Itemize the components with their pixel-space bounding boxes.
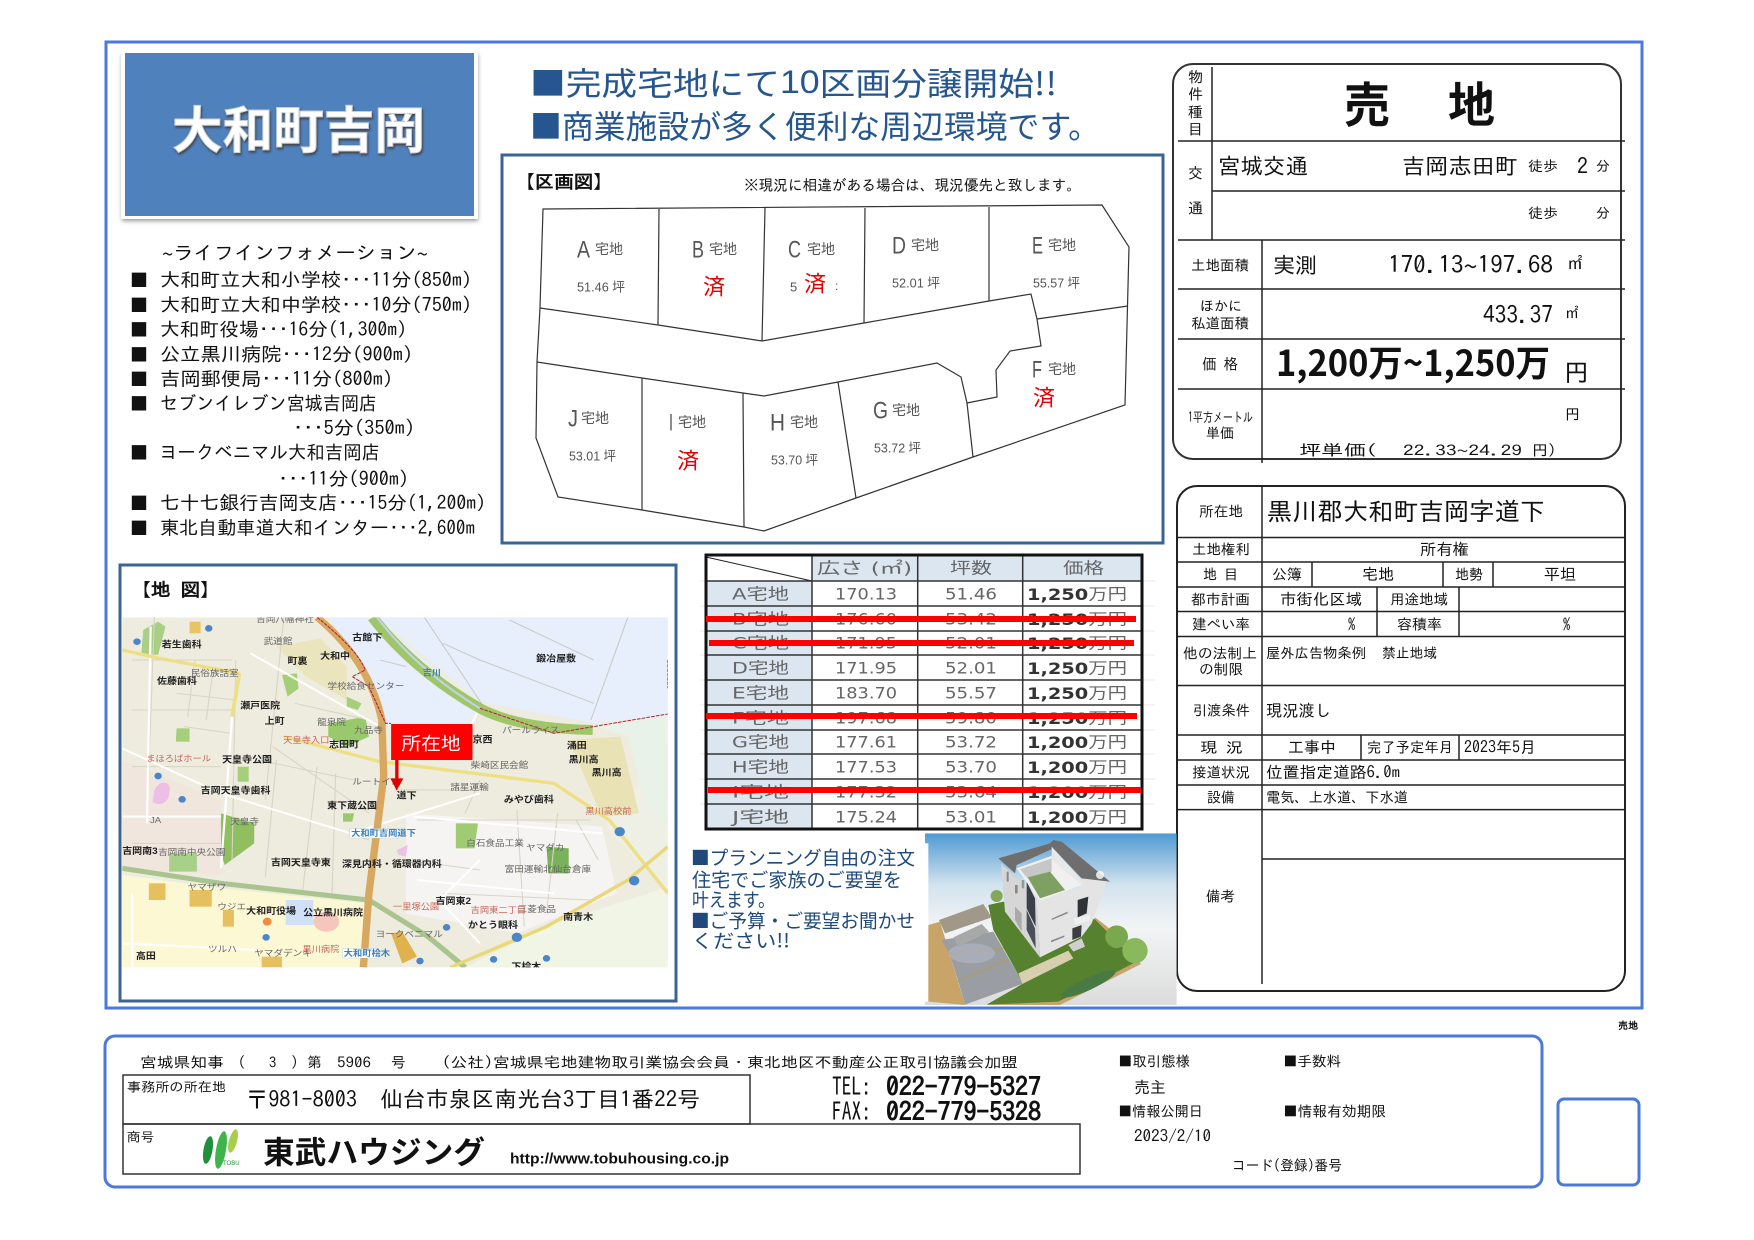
details text: 所在地 — [1199, 504, 1243, 518]
details text: 土地権利 — [1192, 542, 1250, 556]
table rows: 53.72 — [945, 732, 997, 752]
map place labels: パールライス — [502, 725, 559, 735]
property type: 売 — [1344, 66, 1390, 136]
table rows: I宅地 — [732, 782, 789, 802]
map place labels: 吉川 — [423, 667, 441, 677]
life information list: ■ — [130, 390, 148, 416]
summary grid lines — [1178, 67, 1625, 463]
table rows: 53.42 — [945, 610, 997, 628]
details text — [1183, 500, 1576, 904]
table rows: 52.01 — [945, 658, 997, 678]
map place labels: 若生歯科 — [162, 639, 202, 650]
details text: % — [1563, 616, 1570, 632]
land area: 土地面積 — [1191, 258, 1250, 272]
table rows: 52.01 — [945, 634, 997, 652]
table rows: 59.80 — [945, 708, 997, 728]
details text: 市街化区域 — [1280, 591, 1362, 607]
table rows: J宅地 — [730, 808, 789, 826]
license line: 宮城県知事 — [140, 1054, 224, 1070]
table rows: 1,200 万円 — [1027, 758, 1127, 776]
map place labels: 吉岡八幡神社 — [256, 614, 314, 624]
license line: 号 — [391, 1054, 406, 1070]
lot labels: 宅地 — [595, 241, 623, 257]
map place labels: ツルハ — [208, 944, 237, 954]
lot labels: 53.70 坪 — [771, 452, 818, 468]
plan heading: 【区画図】 — [515, 172, 613, 191]
map place labels: 天皇寺入口 — [283, 734, 329, 745]
table rows: 55.57 — [945, 684, 997, 702]
company name box: 商号 — [127, 1130, 154, 1144]
lot labels: C — [788, 236, 801, 264]
details text: % — [1348, 616, 1355, 632]
life information list: ■ — [130, 342, 148, 368]
lot labels: : — [835, 279, 838, 293]
details text: 現況渡し — [1266, 702, 1331, 718]
map place labels: 天皇寺 — [230, 816, 259, 826]
panel: property details table — [1177, 486, 1625, 991]
panel: footer company info — [105, 1036, 1542, 1187]
property type — [1188, 66, 1495, 136]
company name box — [123, 1124, 1080, 1174]
lot labels — [568, 232, 1080, 474]
lot labels: 51.46 坪 — [577, 280, 625, 294]
headline: ■完成宅地にて 10区画分譲開始!! — [530, 59, 1057, 105]
table rows: 1,250 万円 — [1027, 708, 1127, 728]
address box: 事務所の所在地 — [127, 1080, 226, 1094]
life information list: ■ — [130, 515, 148, 541]
unit price: 円) — [1532, 442, 1556, 458]
map place labels: ヤマザワ — [188, 883, 226, 892]
map place labels: 吉岡南3 — [122, 846, 158, 857]
private road area: 私道面積 — [1191, 316, 1250, 330]
table rows: 51.46 — [945, 584, 997, 604]
table rows: 1,250 万円 — [1027, 658, 1127, 678]
map place labels: かとう眼科 — [468, 920, 518, 931]
map place labels: 学校給食センター — [327, 680, 404, 691]
map place labels: 黒川病院 — [302, 945, 340, 954]
license line — [140, 1054, 1018, 1070]
map place labels: 吉岡東二丁目 — [471, 904, 526, 915]
license line: 3 — [269, 1054, 276, 1070]
planning message: ください!! — [692, 926, 790, 954]
lot labels: 済 — [804, 272, 826, 296]
lot labels: 宅地 — [678, 414, 706, 430]
table rows: 1,250 万円 — [1027, 684, 1127, 702]
details text: 容積率 — [1397, 616, 1442, 632]
map heading: 【地 図】 — [131, 580, 220, 599]
table rows: 171.95 — [835, 634, 897, 652]
planning message: 住宅でご家族のご要望を — [692, 866, 902, 892]
map place labels: 大和町吉岡道下 — [351, 828, 416, 838]
details text: 電気、上水道、下水道 — [1266, 790, 1408, 804]
lot labels: J — [568, 406, 578, 432]
unit price: 22.33 ~24.29 — [1403, 440, 1522, 460]
license line: 第 — [307, 1054, 322, 1070]
map place labels: 大和中 — [320, 651, 350, 662]
lot labels: D — [892, 232, 906, 260]
house illustration — [925, 833, 1177, 1005]
license line: 5906 — [337, 1054, 371, 1070]
address box — [123, 1075, 750, 1124]
life information list: ■ — [130, 440, 148, 466]
transaction info: 2023/2/10 — [1134, 1128, 1211, 1144]
table rows: A宅地 — [732, 584, 789, 604]
license line: ) — [291, 1054, 298, 1070]
headline — [530, 59, 1100, 148]
transaction info — [1118, 1054, 1386, 1172]
map place labels: 志田町 — [329, 739, 359, 751]
plan note: ※現況に相違がある場合は、現況優先と致します。 — [744, 178, 1081, 192]
table rows: 197.68 — [835, 708, 897, 728]
private road area — [1191, 299, 1580, 330]
map place labels: 古館下 — [352, 632, 383, 644]
transaction info: ■情報有効期限 — [1283, 1104, 1386, 1118]
table rows: 1,200 万円 — [1027, 732, 1127, 752]
lot labels: 53.01 坪 — [569, 448, 616, 464]
map place labels: 民俗族話室 — [191, 668, 239, 678]
outer frame — [106, 42, 1642, 1008]
table rows: E宅地 — [732, 684, 789, 702]
map place labels: 上町 — [265, 716, 285, 727]
lot labels: 宅地 — [709, 241, 737, 257]
life information list: 公立黒川病院･･･12分(900m) — [160, 345, 413, 364]
table rows: 175.24 — [835, 808, 897, 826]
phone numbers: FAX: — [832, 1099, 871, 1125]
table rows: 1,200 万円 — [1027, 808, 1127, 826]
transport: 吉岡志田町 — [1402, 155, 1518, 177]
details text: 工事中 — [1288, 739, 1336, 755]
details text: 備考 — [1206, 888, 1235, 904]
company logo: TOBU — [223, 1161, 240, 1167]
headline: ■商業施設が多く便利な周辺環境です。 — [530, 102, 1100, 148]
lot labels: G — [873, 398, 888, 424]
map place labels: 高田 — [136, 951, 156, 962]
map place labels — [122, 614, 632, 973]
map place labels: 武道館 — [264, 635, 292, 646]
table rows: C宅地 — [732, 634, 789, 652]
license line: ( — [238, 1054, 245, 1070]
transaction info: 売主 — [1134, 1079, 1166, 1095]
details text: 建ぺい率 — [1192, 616, 1250, 632]
life information list: 東北自動車道大和インター･･･2,600m — [160, 518, 475, 538]
map place labels: 京西 — [472, 734, 492, 745]
transport: 2 — [1577, 155, 1588, 177]
panel: lot plan — [502, 155, 1163, 543]
table rows: 53.64 — [945, 782, 997, 802]
transport: 通 — [1188, 200, 1203, 216]
table rows: G宅地 — [732, 732, 789, 752]
map place labels: 吉岡東2 — [436, 896, 471, 907]
pricing table — [700, 555, 1155, 829]
map place labels: 九品寺 — [354, 725, 383, 735]
map place labels: 瀬戸医院 — [240, 700, 281, 711]
details text: 平坦 — [1544, 566, 1576, 582]
table rows — [730, 584, 1127, 826]
life information list: ヨークベニマル大和吉岡店 — [159, 443, 380, 462]
map place labels: 大和町役場 — [246, 906, 297, 917]
lot labels: 52.01 坪 — [892, 276, 940, 290]
land area: ㎡ — [1566, 255, 1584, 273]
details text: 完了予定年月 — [1367, 740, 1453, 754]
details text: 禁止地域 — [1382, 646, 1437, 660]
life information list: ･･･11分(900m) — [278, 470, 409, 488]
lot labels: 55.57 坪 — [1033, 276, 1080, 290]
life information list: ■ — [130, 490, 148, 516]
details text: 他の法制上 — [1183, 646, 1257, 660]
company name box: http://www.tobuhousing.co.jp — [510, 1150, 729, 1168]
map place labels: ヨークベニマル — [376, 930, 443, 939]
property type: 種 — [1188, 104, 1203, 120]
property type: 件 — [1188, 86, 1203, 102]
life information list: 七十七銀行吉岡支店･･･15分(1,200m) — [160, 494, 486, 512]
table rows: 1,250 万円 — [1027, 634, 1127, 652]
table rows: B宅地 — [732, 610, 789, 628]
price: 円 — [1564, 360, 1589, 386]
map place labels: 南青木 — [563, 912, 594, 923]
transaction info: コード(登録)番号 — [1232, 1158, 1342, 1172]
sold-out strike lines — [706, 616, 1141, 793]
life information list: 大和町立大和小学校･･･11分(850m) — [160, 270, 472, 290]
map place labels: 一里塚公園 — [393, 902, 439, 911]
table header: 広さ (㎡) — [817, 558, 912, 578]
street map — [122, 617, 668, 968]
map place labels: 鍛冶屋敷 — [536, 653, 577, 665]
table rows: 1,250 万円 — [1027, 584, 1127, 604]
lot labels: 済 — [703, 274, 725, 300]
table rows: F宅地 — [732, 708, 789, 728]
map place labels: 公立黒川病院 — [303, 907, 363, 919]
transport — [1188, 155, 1610, 220]
table header: 価格 — [1063, 558, 1104, 578]
transaction info: ■手数料 — [1283, 1054, 1341, 1068]
table rows: 171.95 — [835, 658, 897, 678]
table rows: 183.70 — [835, 684, 897, 702]
map place labels: 東下蔵公園 — [327, 800, 377, 811]
table rows: 1,200 万円 — [1027, 782, 1127, 802]
map place labels: ルートイン — [352, 777, 400, 786]
life information list: ■ — [130, 292, 148, 318]
transport: 交 — [1188, 166, 1203, 180]
private road area: 433.37 — [1483, 302, 1553, 326]
lot labels: H — [770, 410, 785, 436]
lot labels: 済 — [677, 448, 699, 474]
map place labels: 道下 — [397, 790, 417, 801]
planning message: ■ご予算・ご要望お聞かせ — [691, 906, 915, 934]
lot labels: 5 — [790, 280, 797, 294]
map place labels: 天皇寺公園 — [222, 754, 272, 765]
details text: 用途地域 — [1390, 592, 1448, 606]
land area — [1191, 246, 1584, 282]
transport: 徒歩 — [1528, 206, 1558, 220]
land area: 170.13~197.68 — [1388, 246, 1553, 282]
price: 1,200万~1,250万 — [1276, 335, 1550, 387]
life information list: ~ライフインフォメーション ~ — [162, 240, 428, 266]
property type: 地 — [1448, 66, 1495, 136]
table rows: 1,250 万円 — [1027, 610, 1127, 628]
lot labels: 済 — [1033, 386, 1055, 410]
map place labels: 龍泉院 — [317, 717, 346, 727]
planning message: 叶えます。 — [692, 886, 775, 912]
planning message: ■プランニング自由の注文 — [691, 844, 915, 870]
table rows: 177.53 — [835, 758, 897, 776]
table rows: H宅地 — [732, 758, 789, 776]
lot labels: F — [1032, 356, 1042, 384]
map place labels: 佐藤歯科 — [157, 676, 197, 687]
address box: 〒981-8003 — [246, 1088, 357, 1110]
company logo — [201, 1128, 240, 1170]
details grid lines — [1178, 487, 1625, 984]
details text: 引渡条件 — [1193, 702, 1250, 718]
table rows: D宅地 — [732, 658, 789, 678]
details text: 宅地 — [1362, 566, 1394, 582]
map place labels: まほろばホール — [146, 754, 211, 763]
map place labels: ウジエ — [217, 902, 246, 911]
lot labels: 宅地 — [581, 410, 609, 426]
details text: の制限 — [1199, 662, 1243, 676]
map place labels: 下桧木 — [511, 961, 542, 973]
property type: 物 — [1188, 70, 1203, 84]
document tag: 売地 — [1618, 1020, 1638, 1031]
details text: 公簿 — [1272, 566, 1302, 582]
unit price: 単価 — [1206, 426, 1234, 440]
transport: 分 — [1596, 206, 1610, 220]
details text: 屋外広告物条例 — [1266, 645, 1366, 660]
company name box: 東武ハウジング — [263, 1128, 485, 1172]
map place labels: 吉岡天皇寺歯科 — [201, 785, 271, 796]
lot labels: 53.72 坪 — [874, 440, 921, 456]
map place labels: ヤマダデンキ — [254, 948, 312, 958]
map place labels: 白石食品工業 — [466, 838, 524, 848]
details text: 地 目 — [1203, 566, 1238, 582]
table rows: 177.61 — [835, 732, 897, 752]
map place labels: 黒川高校前 — [585, 805, 632, 816]
lot labels: I — [669, 410, 673, 436]
details text: 都市計画 — [1191, 592, 1250, 606]
title box: area name — [121, 50, 478, 221]
lot labels: A — [577, 236, 590, 264]
map place labels: 柴崎区民会館 — [471, 759, 528, 770]
transaction info: ■取引態様 — [1118, 1054, 1190, 1068]
phone numbers: 022-779-5327 — [886, 1074, 1041, 1100]
stamp box — [1558, 1099, 1639, 1185]
phone numbers: 022-779-5328 — [886, 1099, 1041, 1125]
life information list — [130, 240, 486, 541]
unit price — [1188, 406, 1580, 460]
location callout — [390, 724, 472, 791]
map place labels: 黒川高 — [592, 767, 622, 779]
transport: 宮城交通 — [1218, 155, 1308, 177]
private road area: ほかに — [1200, 299, 1242, 313]
table rows: 170.13 — [835, 584, 897, 604]
life information list: ･･･5分(350m) — [293, 418, 415, 438]
transport: 分 — [1596, 159, 1610, 173]
lot labels: 宅地 — [790, 414, 818, 430]
location callout: 所在地 — [401, 730, 461, 755]
details text: 2023年5月 — [1464, 739, 1536, 755]
table rows: 53.70 — [945, 758, 997, 776]
details text: 設備 — [1207, 790, 1235, 804]
map place labels: 諸星運輸 — [450, 782, 489, 792]
lot labels: 宅地 — [1048, 237, 1076, 253]
map icons — [133, 625, 639, 964]
map place labels: みやび歯科 — [504, 794, 554, 805]
transaction info: ■情報公開日 — [1118, 1104, 1203, 1118]
table rows: 177.32 — [835, 782, 897, 802]
life information list: 大和町役場･･･16分(1,300m) — [160, 320, 407, 339]
details text: 所有権 — [1420, 541, 1469, 557]
life information list: ■ — [130, 267, 148, 293]
details text: 接道状況 — [1192, 764, 1250, 780]
map place labels: 町裏 — [288, 656, 308, 667]
map place labels: 涌田 — [567, 740, 587, 751]
map place labels: 吉岡南中央公園 — [158, 847, 225, 857]
unit price: 円 — [1565, 406, 1580, 422]
unit price: 1平方メートル — [1188, 410, 1253, 424]
price: 価 格 — [1202, 356, 1238, 372]
details text: 現 況 — [1200, 740, 1243, 754]
lot labels: 宅地 — [1048, 361, 1076, 377]
lot labels: 宅地 — [911, 237, 939, 253]
land area: 実測 — [1273, 254, 1317, 276]
phone numbers — [832, 1074, 1041, 1125]
map place labels: JA — [150, 815, 162, 825]
planning message — [691, 844, 915, 954]
details text: 黒川郡大和町吉岡字道下 — [1267, 500, 1545, 524]
life information list: ■ — [130, 366, 148, 392]
lot labels: 宅地 — [807, 241, 835, 257]
lot labels: 宅地 — [892, 402, 920, 418]
life information list: 吉岡郵便局･･･11分(800m) — [160, 370, 393, 388]
life information list: ■ — [130, 316, 148, 342]
transport: 徒歩 — [1528, 159, 1558, 173]
address box: 仙台市泉区南光台3丁目1番22号 — [380, 1088, 700, 1110]
map place labels: 吉岡天皇寺東 — [271, 857, 331, 869]
title box: area name: 大和町吉岡 — [172, 91, 425, 163]
table header — [817, 558, 1104, 578]
map place labels: 黒川高 — [569, 754, 599, 765]
details text: 位置指定道路6.0m — [1266, 764, 1400, 780]
map place labels: ヤマダカ — [526, 842, 565, 852]
life information list: 大和町立大和中学校･･･10分(750m) — [160, 294, 472, 314]
license line: (公社)宮城県宅地建物取引業協会会員・東北地区不動産公正取引協議会加盟 — [442, 1054, 1018, 1070]
table header: 坪数 — [950, 558, 992, 578]
plan outlines — [536, 205, 1129, 531]
details text: 地勢 — [1455, 566, 1483, 582]
panel: property summary — [1173, 64, 1625, 463]
map place labels: 深見内科・循環器内科 — [342, 859, 442, 870]
unit price: 坪単価( — [1299, 442, 1377, 458]
lot labels: E — [1032, 232, 1043, 260]
table rows: 53.01 — [945, 808, 997, 826]
lot labels: B — [692, 236, 704, 264]
table rows: 176.60 — [835, 610, 897, 628]
map place labels: 三菱食品 — [518, 903, 556, 914]
life information list: セブンイレブン宮城吉岡店 — [160, 394, 377, 413]
private road area: ㎡ — [1564, 305, 1580, 321]
property type: 目 — [1188, 122, 1203, 136]
map place labels: 富田運輸北仙台倉庫 — [505, 863, 591, 874]
phone numbers: TEL: — [832, 1074, 871, 1100]
map place labels: 大和町桧木 — [344, 948, 390, 958]
panel: map — [120, 565, 676, 1001]
